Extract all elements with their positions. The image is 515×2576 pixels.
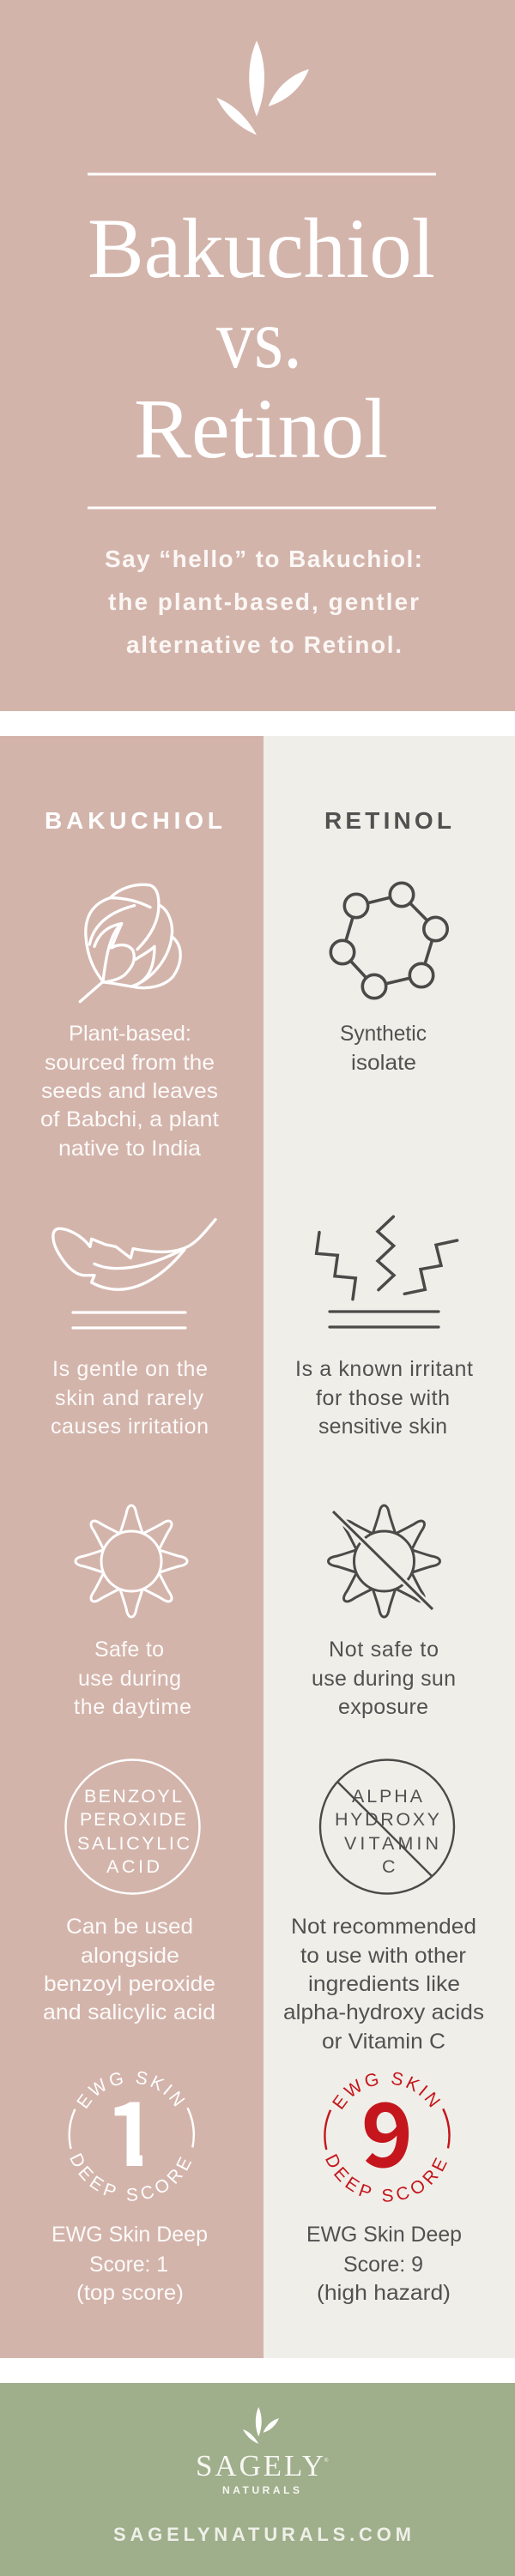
text: EWG score 9: (high hazard) [317,2281,451,2305]
badge: EWG score 9 [324,2065,451,2202]
subtitle: the plant-based, gentler [108,588,419,615]
text: EWG score 1: (top score) [76,2281,184,2305]
text: safe daytime [74,1638,191,1719]
badge: compatible ingredients: BENZOYL [84,1786,182,1807]
badge: compatible ingredients: ACID [106,1856,160,1877]
text: safe daytime: use during [78,1667,181,1691]
text: not recommended [283,1915,484,2054]
text: not safe: exposure [338,1695,428,1719]
panel: header [0,0,515,711]
text: not safe [312,1638,456,1719]
text: not recommended: ingredients like [308,1972,460,1996]
panel: bakuchiol column [0,736,264,2358]
text: synthetic [340,1022,427,1075]
text: plant-based [40,1022,219,1161]
title: vs. [216,291,302,386]
text: not recommended: or Vitamin C [322,2030,445,2054]
text: gentle: causes irritation [51,1415,209,1439]
text: plant-based: seeds and leaves [41,1079,218,1103]
text: plant-based: sourced from the [45,1051,215,1075]
badge: EWG score 1: 1 [106,2064,157,2192]
badge: EWG score 1: DEEP SCORE [70,2153,192,2201]
icon: irritation zigzags [317,1216,457,1300]
text: gentle: skin and rarely [55,1386,204,1410]
logo: Sagely Naturals: NATURALS [222,2484,300,2496]
icon: skin lines [73,1312,185,1328]
heading: retinol: RETINOL [324,807,451,834]
text: not recommended: alpha-hydroxy acids [283,2000,484,2024]
text: irritant: Is a known irritant [295,1357,473,1381]
title: Bakuchiol [88,201,435,296]
text: gentle [51,1357,209,1439]
text: irritant: sensitive skin [318,1415,447,1439]
title: Retinol [134,381,388,476]
badge: incompatible ingredients: C [382,1856,396,1877]
text: EWG score 9: EWG Skin Deep [306,2223,462,2247]
heading: bakuchiol: BAKUCHIOL [45,807,222,834]
text: EWG score 9 [306,2223,462,2305]
icon: molecule ring [330,883,447,998]
text: can be used [43,1915,215,2024]
text: EWG score 1 [52,2223,208,2305]
logo: Sagely Naturals [196,2449,329,2496]
text: plant-based: native to India [58,1137,201,1161]
text: EWG score 1: Score: 1 [89,2253,168,2277]
icon: feather [53,1220,215,1289]
text: plant-based: Plant-based: [69,1022,191,1046]
logo: Sagely Naturals: ® [324,2458,329,2464]
text: not recommended: to use with other [300,1944,466,1968]
icon: plant leaf [80,884,180,1002]
badge: EWG score 9: DEEP SCORE [325,2153,447,2202]
badge: incompatible ingredients: ALPHA [352,1786,423,1807]
text: not safe: use during sun [312,1667,456,1691]
badge: EWG score 1: EWG SKIN [76,2071,185,2108]
title [88,173,436,510]
text: irritant: for those with [316,1386,450,1410]
badge: incompatible ingredients: HYDROXY [335,1809,439,1830]
text: EWG score 1: EWG Skin Deep [52,2223,208,2247]
text: EWG score 9: Score: 9 [343,2253,423,2277]
text: can be used: and salicylic acid [43,2000,215,2024]
panel: footer [0,2383,515,2576]
subtitle: alternative to Retinol. [126,631,402,658]
text: can be used: alongside [81,1944,179,1968]
text: safe daytime: the daytime [74,1695,191,1719]
text: not safe: Not safe to [329,1638,439,1662]
badge: compatible ingredients [65,1760,199,1894]
panel: retinol column [264,736,515,2358]
logo: Sagely Naturals: SAGELY [196,2449,324,2482]
text: safe daytime: Safe to [94,1638,164,1662]
icon: sun [76,1505,187,1617]
badge: incompatible ingredients: VITAMIN [344,1833,439,1854]
badge: compatible ingredients: PEROXIDE [80,1809,186,1830]
badge: EWG score 1 [69,2071,195,2201]
text: irritant [295,1357,473,1439]
badge: EWG score 9: EWG SKIN [332,2072,441,2110]
website url: SAGELYNATURALS.COM [113,2524,411,2545]
subtitle: Say “hello” to Bakuchiol: [105,546,422,572]
icon: three leaves [216,40,309,135]
badge: incompatible ingredients [320,1760,454,1894]
icon: irritated skin lines [330,1312,439,1327]
text: plant-based: of Babchi, a plant [40,1107,219,1131]
badge: compatible ingredients: SALICYLIC [77,1833,190,1854]
badge: EWG score 9: 9 [361,2065,413,2193]
text: gentle: Is gentle on the [52,1357,208,1381]
text: synthetic: Synthetic [340,1022,427,1046]
text: synthetic: isolate [351,1051,416,1075]
icon: footer leaves [243,2407,279,2444]
text: not recommended: Not recommended [291,1915,476,1939]
subtitle [105,546,422,658]
text: can be used: benzoyl peroxide [44,1972,215,1996]
icon: crossed-out sun [328,1505,439,1617]
text: can be used: Can be used [66,1915,193,1939]
